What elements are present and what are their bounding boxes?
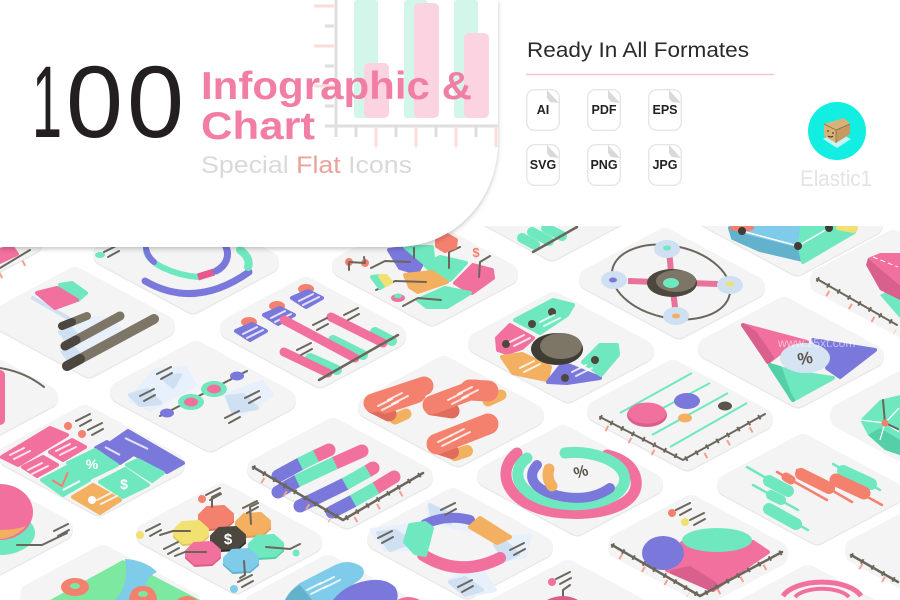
card: table grid: % <box>86 456 99 472</box>
icon: PNG file <box>588 145 620 185</box>
icon: brand avatar with box <box>808 102 866 160</box>
card: partial chart, bottom <box>490 560 645 600</box>
card: triangular percent chart: % <box>796 348 814 369</box>
brand name: Elastic1 <box>800 166 872 191</box>
card: curve chart, left edge <box>0 349 47 438</box>
card: radial network <box>590 234 754 330</box>
card: bubble line chart <box>598 371 765 460</box>
panel: white header with rounded corner <box>0 0 900 247</box>
icon: SVG file <box>527 145 559 185</box>
icon: PNG file: PNG <box>590 158 618 172</box>
card: grouped bar chart <box>231 284 398 380</box>
card: rainbow radial chart: % <box>572 462 591 483</box>
card: triangular percent chart: www.25xt.com <box>777 336 855 350</box>
card: map, bottom <box>20 545 200 600</box>
icon: AI file: AI <box>537 103 549 117</box>
title: Infographic & Chart: Infographic & <box>201 65 472 108</box>
card: stair bars <box>463 161 627 252</box>
title: Infographic & Chart: Chart <box>201 105 315 148</box>
card: area chart <box>608 495 788 600</box>
icon: JPG file <box>649 145 681 185</box>
icon: EPS file: EPS <box>652 103 678 117</box>
card: hexagon chart: $ <box>224 531 233 548</box>
card: table grid <box>2 414 183 513</box>
icon: AI file <box>527 90 559 130</box>
icon: PDF file: PDF <box>592 103 617 117</box>
heading: formats: Ready In All Formates <box>527 39 749 62</box>
card: segmented donut with notes <box>372 499 542 595</box>
card: stacked bar chart <box>253 429 423 520</box>
card: timeline <box>121 352 285 442</box>
title number: 0 <box>127 45 184 159</box>
card: radar polygon <box>708 176 872 266</box>
card: candlestick chart <box>728 445 892 534</box>
title number <box>32 45 184 159</box>
card: overlapping circles, left edge <box>0 481 69 570</box>
card: segmented funnel: $ <box>472 245 480 260</box>
chart: faded bar chart behind the title <box>314 0 498 147</box>
icon: JPG file: JPG <box>652 158 678 172</box>
icon: EPS file <box>649 90 681 130</box>
title number: 0 <box>66 45 123 159</box>
card: concentric rings, bottom <box>740 565 876 600</box>
card: table grid: $ <box>120 476 128 492</box>
card: rainbow radial chart <box>488 436 652 526</box>
card: speech shape bars <box>369 367 533 456</box>
card: flag bar chart <box>0 278 164 368</box>
card: segmented funnel <box>343 226 507 316</box>
icon: PDF file <box>588 90 620 130</box>
card: triangular percent chart <box>709 308 875 400</box>
card: ring chart <box>95 214 268 304</box>
title number: 1 <box>32 45 62 159</box>
card: segmented pie <box>479 300 643 392</box>
card: top-left sliver <box>0 194 32 284</box>
icon: SVG file: SVG <box>530 158 556 172</box>
card: pill bars, bottom <box>246 555 420 600</box>
card: axis and cap shape, right edge <box>810 230 900 338</box>
card: gem shape, right edge <box>830 370 900 462</box>
subtitle: Special Flat Icons <box>201 152 412 179</box>
title: Infographic & Chart <box>201 65 472 148</box>
card: axis, lower right <box>845 514 900 589</box>
card: hexagon chart <box>136 488 311 593</box>
